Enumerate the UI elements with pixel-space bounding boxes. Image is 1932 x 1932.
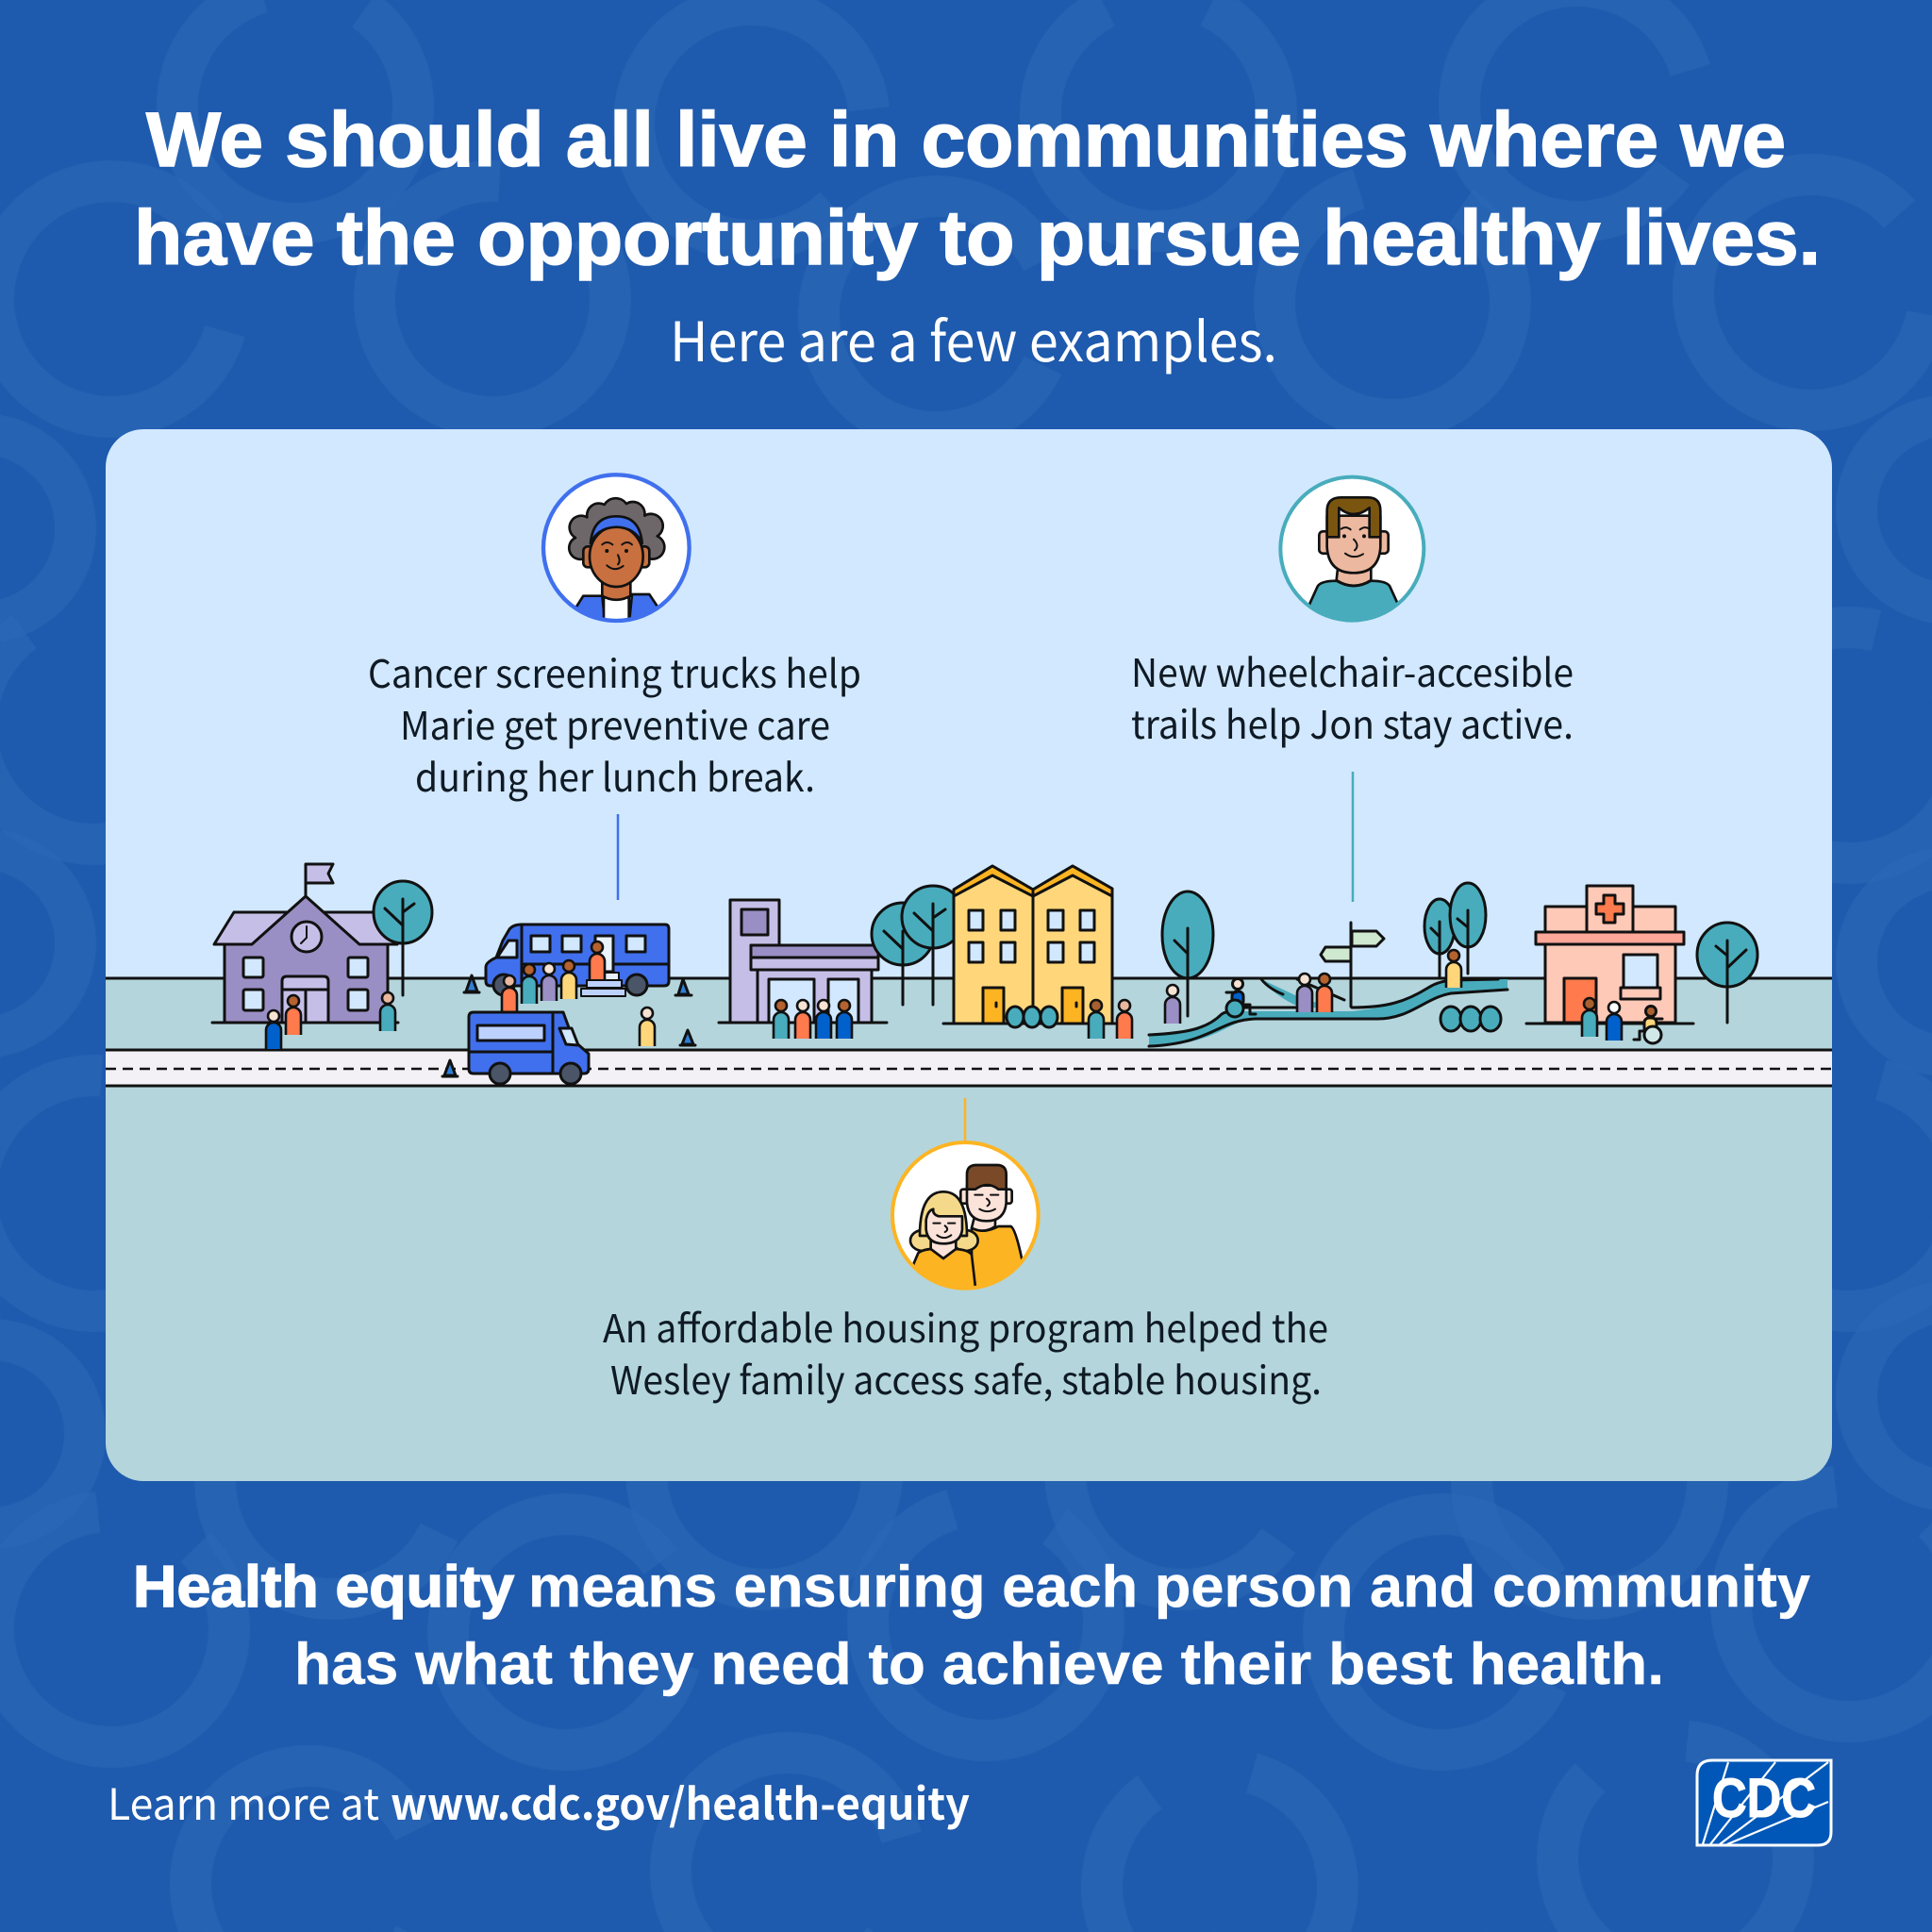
school [212, 864, 398, 1023]
definition statement: Health equity [133, 1555, 515, 1620]
leader line: Wesley family [964, 1098, 966, 1141]
mobile van [469, 1012, 589, 1084]
avatar: Marie [543, 475, 690, 625]
leader line: Marie [617, 814, 619, 900]
tree [374, 881, 432, 995]
avatar: Jon [1280, 477, 1424, 625]
people: trail [1297, 950, 1461, 1012]
subtitle: Here are a few examples. [670, 298, 1277, 377]
footer link [108, 1771, 970, 1833]
definition statement: has what they need to achieve their best health. [294, 1632, 1664, 1697]
title: have the opportunity to pursue healthy lives. [134, 195, 1821, 281]
people: clinic [1582, 998, 1622, 1041]
people: community building [774, 1000, 852, 1039]
text: Jon: trails help Jon stay active. [1131, 693, 1574, 750]
trail people and trees [1424, 883, 1501, 1031]
text: Jon [1132, 656, 1572, 747]
affordable housing [943, 866, 1123, 1027]
footer link: Learn more at [108, 1771, 379, 1833]
wheelchair-accessible trail [1149, 979, 1507, 1046]
avatar: Wesley family [892, 1142, 1039, 1295]
text: Marie: Marie get preventive care [400, 694, 830, 751]
definition statement: means ensuring each person and community [528, 1555, 1811, 1620]
footer link: www.cdc.gov/health-equity [391, 1771, 970, 1833]
tall tree [1162, 891, 1213, 1016]
person using wheelchair on trail [1226, 979, 1256, 1017]
community building [719, 900, 887, 1023]
title [134, 97, 1821, 281]
clinic [1526, 886, 1693, 1024]
trees beside housing [872, 886, 964, 1005]
tree beside clinic [1697, 923, 1757, 1023]
CDC logo: CDC [1712, 1768, 1816, 1829]
text: Jon: New wheelchair-accesible [1131, 641, 1574, 698]
signpost [1321, 923, 1384, 1007]
definition statement [133, 1555, 1811, 1697]
text: Wesley family: An affordable housing program helped the [603, 1297, 1328, 1354]
text: Marie [370, 657, 859, 802]
CDC logo [1697, 1760, 1831, 1845]
text: Marie: Cancer screening trucks help [368, 642, 861, 699]
person using wheelchair at clinic [1634, 1006, 1662, 1043]
text: Wesley family [603, 1311, 1326, 1404]
cones [442, 975, 695, 1076]
leader line: Jon [1352, 772, 1354, 902]
text: Marie: during her lunch break. [415, 746, 815, 803]
people: housing [1089, 985, 1180, 1039]
people: bus line and school [266, 941, 655, 1049]
text: Wesley family: Wesley family access safe, stable housing. [610, 1349, 1322, 1406]
road [106, 1050, 1832, 1086]
title: We should all live in communities where we [146, 97, 1786, 183]
cancer screening bus [486, 924, 669, 996]
panel: community scene [106, 429, 1832, 1481]
